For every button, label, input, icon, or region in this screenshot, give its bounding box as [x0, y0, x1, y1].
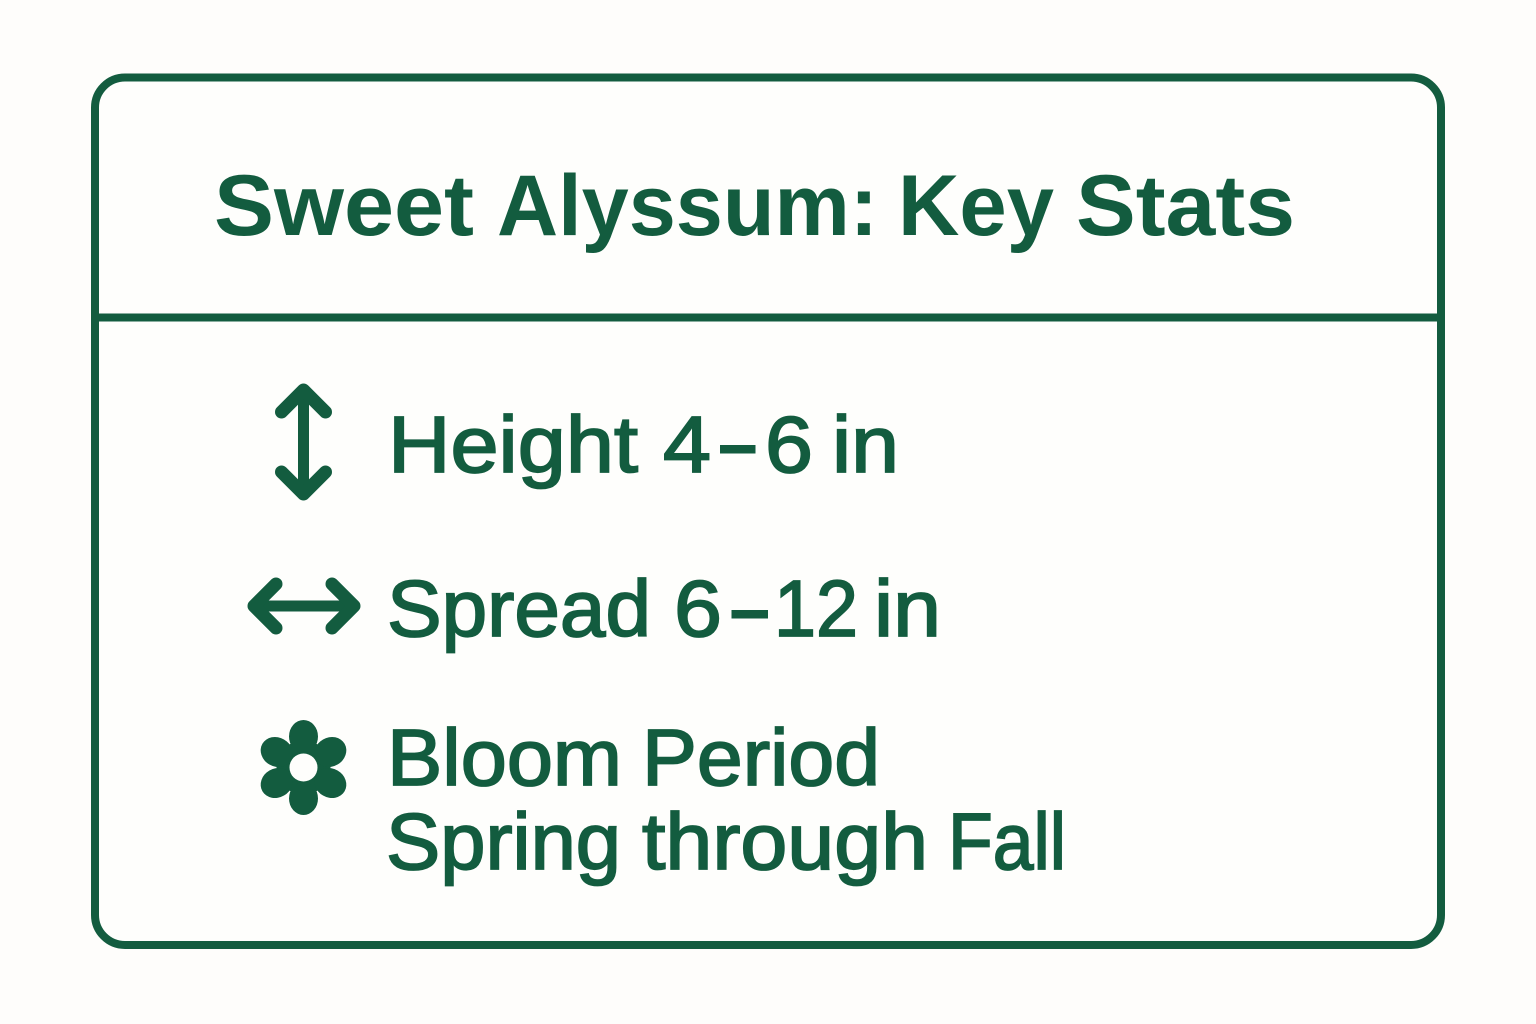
icon: spread arrow	[254, 584, 354, 628]
title	[214, 158, 1295, 254]
height stat: 6	[765, 400, 813, 489]
panel: key stats card	[95, 78, 1441, 945]
height stat: 4	[663, 400, 711, 489]
spread stat: Spread	[387, 564, 651, 653]
bloom period stat: Fall	[948, 797, 1066, 886]
spread stat: 6	[674, 564, 722, 653]
bloom period stat	[386, 713, 1066, 886]
icon: height arrow	[282, 390, 326, 494]
height stat: Height	[388, 400, 638, 489]
spread stat: in	[874, 564, 941, 653]
spread stat	[387, 564, 941, 653]
spread stat: 12	[774, 564, 858, 653]
height stat: in	[832, 400, 899, 489]
title: Alyssum:	[497, 158, 878, 254]
bloom period stat: Period	[642, 713, 880, 802]
height stat	[388, 400, 899, 489]
icon: flower	[255, 720, 352, 815]
title: Stats	[1076, 158, 1295, 254]
title: Key	[898, 158, 1054, 254]
bloom period stat: through	[642, 797, 928, 886]
bloom period stat: Spring	[386, 797, 621, 886]
bloom period stat: Bloom	[387, 713, 622, 802]
title: Sweet	[214, 158, 474, 254]
